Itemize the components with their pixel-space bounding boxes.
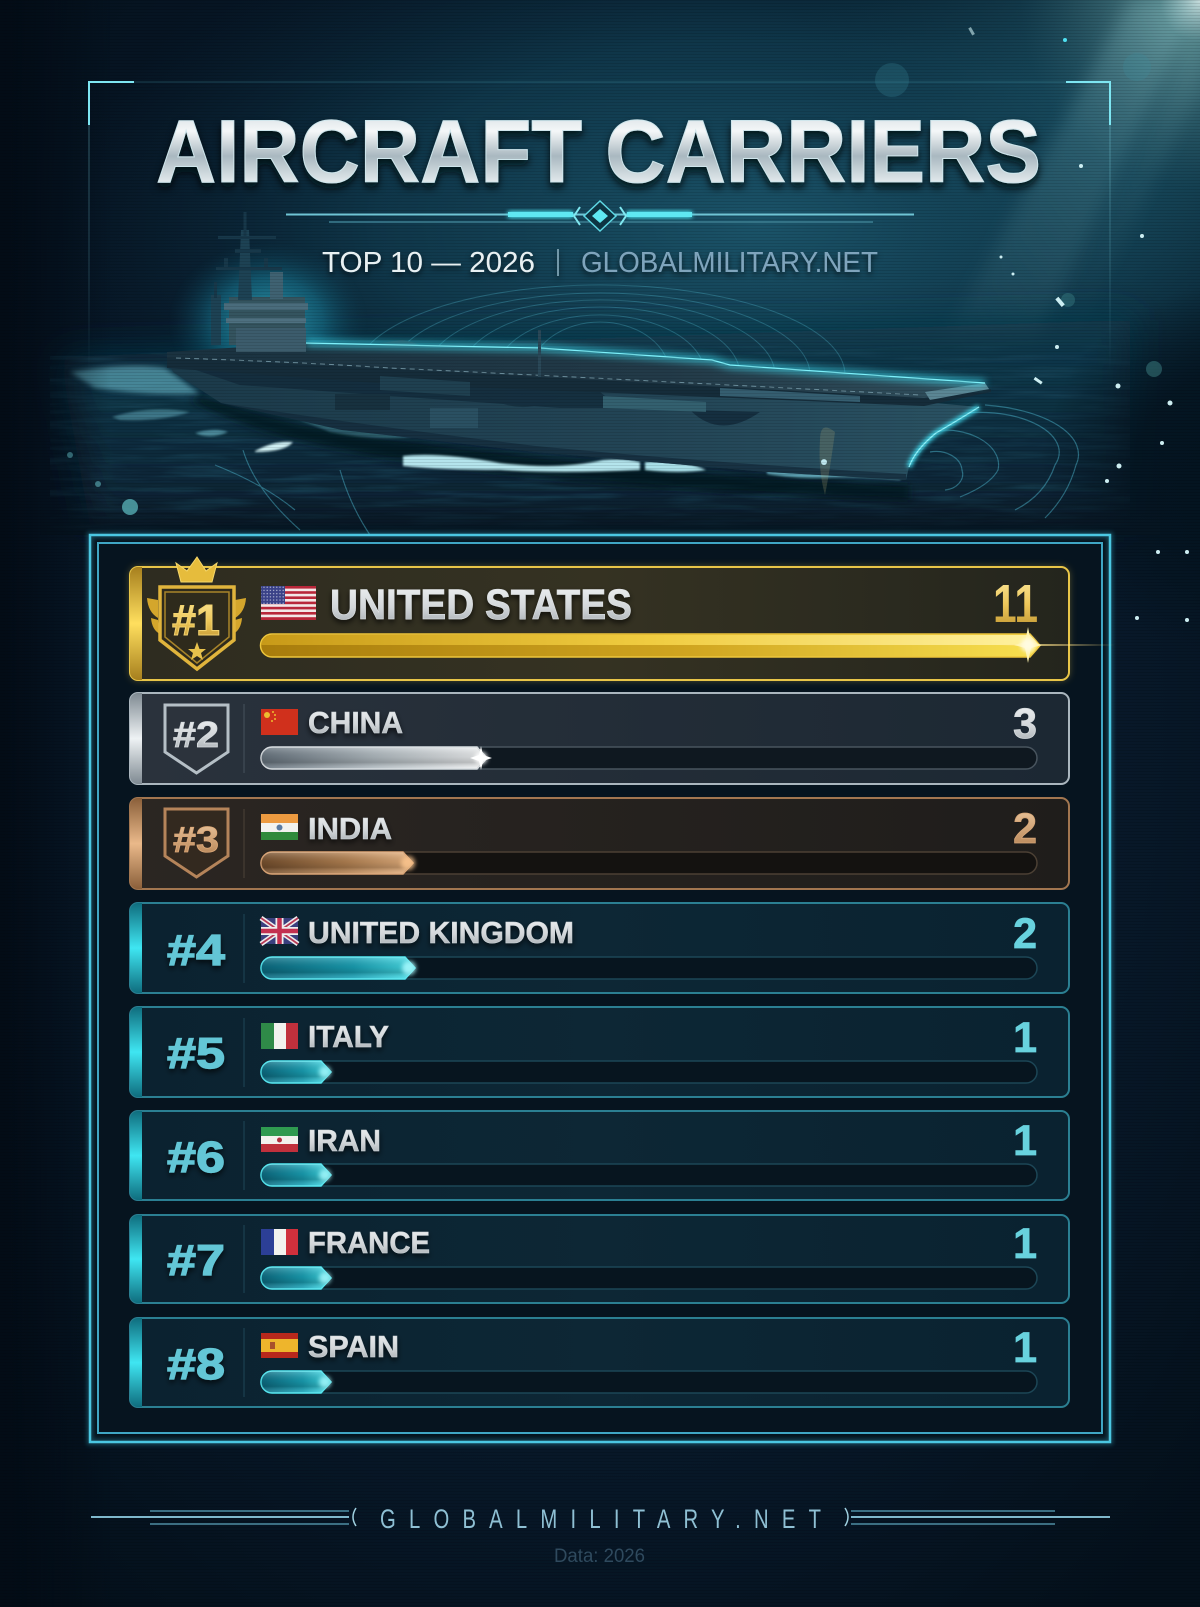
ranking panel bbox=[90, 535, 1115, 1442]
rank label: #4 bbox=[167, 926, 226, 975]
bar track bbox=[261, 1061, 1037, 1083]
hull shadow bands bbox=[190, 368, 620, 408]
subtitle date: TOP 10 — 2026 bbox=[322, 247, 535, 279]
bar fill bbox=[261, 852, 415, 874]
bar fill bbox=[261, 746, 492, 770]
bow light reflection bbox=[820, 428, 835, 495]
row 6: Iran bbox=[130, 1111, 1069, 1200]
subtitle bbox=[322, 247, 878, 279]
radar arcs bbox=[370, 284, 846, 372]
bow glow bbox=[909, 407, 979, 467]
header frame bbox=[88, 82, 1110, 375]
bar track bbox=[261, 1267, 1037, 1289]
corner bracket right bbox=[1066, 82, 1110, 125]
flag: USA bbox=[261, 586, 316, 620]
rank badge #3 bbox=[165, 809, 228, 877]
value: 2 bbox=[1013, 805, 1037, 853]
rank label: #8 bbox=[167, 1340, 225, 1389]
rank label: #5 bbox=[167, 1029, 225, 1078]
footer ornament left bbox=[91, 1508, 356, 1526]
island glow bbox=[168, 242, 368, 402]
title: AIRCRAFT CARRIERS bbox=[156, 101, 1041, 201]
deck edge glow bbox=[306, 343, 985, 383]
foam wake bbox=[70, 366, 906, 480]
rank label: #6 bbox=[167, 1133, 225, 1182]
value: 1 bbox=[1013, 1324, 1037, 1372]
footer ornament right bbox=[845, 1508, 1110, 1526]
rank badge #2 bbox=[165, 705, 228, 773]
country name: UNITED STATES bbox=[330, 581, 632, 629]
value: 1 bbox=[1013, 1220, 1037, 1268]
row 5: Italy bbox=[130, 1007, 1069, 1097]
flag: China bbox=[261, 709, 298, 735]
flag: UK bbox=[261, 918, 298, 944]
rank badge #3: #3 bbox=[173, 819, 219, 860]
rank badge #1 with crown: #1 bbox=[172, 596, 220, 645]
bar fill bbox=[261, 1371, 331, 1393]
bar track bbox=[261, 1164, 1037, 1186]
country name: SPAIN bbox=[308, 1329, 399, 1364]
bar track bbox=[261, 747, 1037, 769]
value: 1 bbox=[1013, 1117, 1037, 1165]
bar fill bbox=[261, 1164, 331, 1186]
side galleries bbox=[603, 396, 706, 412]
corner bracket left bbox=[89, 82, 134, 125]
bar bbox=[260, 627, 1115, 663]
row 1: United States bbox=[130, 557, 1115, 680]
row 4: United Kingdom bbox=[130, 903, 1069, 993]
hull bbox=[167, 360, 979, 480]
sea surface bbox=[60, 320, 1130, 525]
row 2: China bbox=[130, 693, 1069, 784]
value: 1 bbox=[1013, 1014, 1037, 1062]
row 7: France bbox=[130, 1215, 1069, 1303]
subtitle site: GLOBALMILITARY.NET bbox=[581, 247, 878, 279]
deck lights bbox=[176, 358, 920, 395]
flag: Italy bbox=[261, 1023, 298, 1049]
country name: INDIA bbox=[308, 811, 392, 846]
rank badge #1 with crown bbox=[147, 557, 246, 669]
rank badge #2: #2 bbox=[173, 714, 219, 755]
row 8: Spain bbox=[130, 1318, 1069, 1407]
rank label: #7 bbox=[167, 1236, 225, 1285]
bar fill bbox=[261, 957, 416, 979]
country name: UNITED KINGDOM bbox=[308, 915, 574, 950]
flag: Iran bbox=[261, 1127, 298, 1152]
country name: IRAN bbox=[308, 1123, 381, 1158]
flight deck bbox=[167, 343, 991, 402]
sonar contour lines on water bbox=[215, 405, 1078, 535]
data note: Data: 2026 bbox=[554, 1546, 645, 1567]
bar track bbox=[261, 1371, 1037, 1393]
value: 11 bbox=[993, 574, 1038, 634]
wave texture bbox=[50, 353, 1110, 518]
value: 3 bbox=[1013, 700, 1037, 748]
country name: CHINA bbox=[308, 705, 403, 740]
island superstructure bbox=[211, 212, 541, 377]
flag: France bbox=[261, 1229, 298, 1255]
row 3: India bbox=[130, 798, 1069, 889]
bar track bbox=[261, 957, 1037, 979]
country name: FRANCE bbox=[308, 1225, 430, 1260]
country name: ITALY bbox=[308, 1019, 389, 1054]
aircraft carrier bbox=[167, 212, 991, 495]
crown bbox=[176, 557, 217, 582]
value: 2 bbox=[1013, 910, 1037, 958]
flag: India bbox=[261, 814, 298, 840]
bar fill bbox=[261, 1267, 331, 1289]
title divider with diamond bbox=[286, 201, 914, 231]
water shadow beside hull bbox=[190, 395, 910, 500]
footer site name: GLOBALMILITARY.NET bbox=[380, 1504, 821, 1535]
bar track bbox=[261, 852, 1037, 874]
sparkles and bokeh bbox=[67, 27, 1189, 622]
bar fill bbox=[261, 1061, 331, 1083]
flag: Spain bbox=[261, 1333, 298, 1358]
